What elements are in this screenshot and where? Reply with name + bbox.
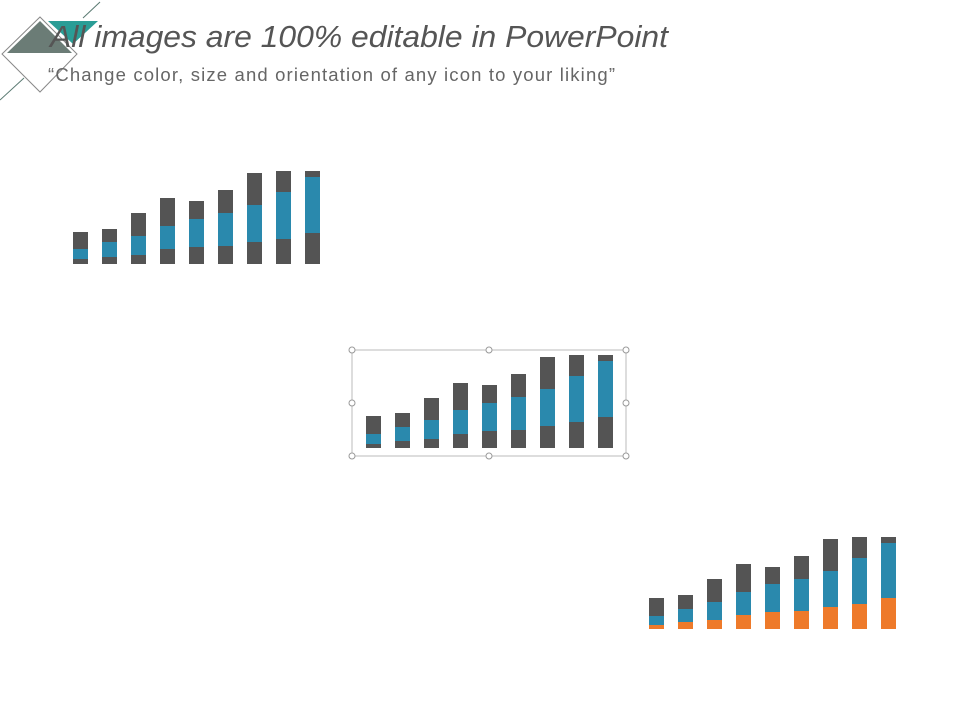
chart 3: gray blue orange stacked bars	[649, 537, 896, 629]
decoration: corner logo	[0, 2, 100, 100]
title: All images are 100% editable in PowerPoint	[48, 19, 669, 54]
subtitle: “Change color, size and orientation of any icon to your liking”	[48, 64, 615, 85]
chart 2: selected bar chart with handles	[349, 347, 629, 459]
chart 1: gray and blue stacked bars	[73, 171, 320, 264]
